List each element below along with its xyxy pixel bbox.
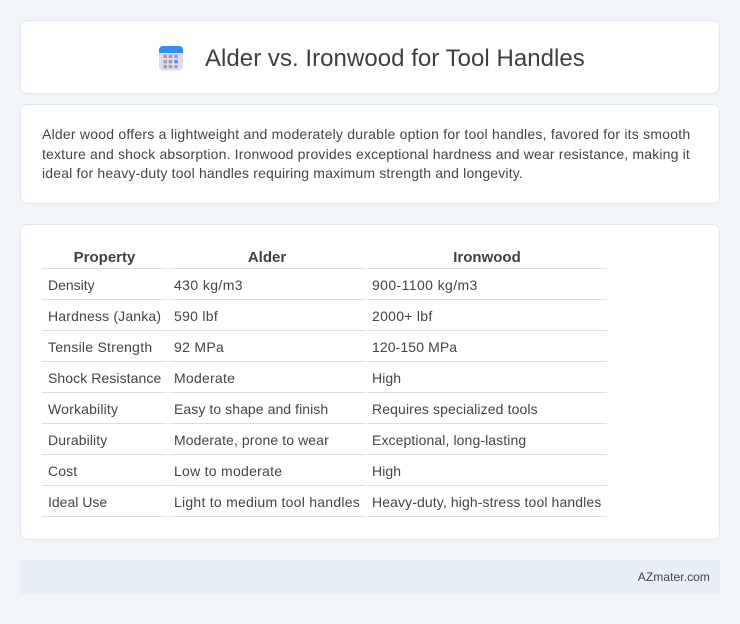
- row: shock resistance: Moderate: [174, 370, 235, 386]
- row: workability: [48, 401, 538, 417]
- row: hardness: 2000+ lbf: [372, 308, 433, 324]
- row: durability: Durability: [48, 432, 107, 448]
- header row: Property: [74, 249, 135, 266]
- row: tensile strength: [48, 339, 458, 355]
- row: durability: Moderate, prone to wear: [174, 432, 329, 448]
- row: tensile strength: 120-150 MPa: [372, 339, 457, 355]
- header row: [74, 249, 521, 266]
- row: shock resistance: [48, 370, 401, 386]
- row: shock resistance: High: [372, 370, 401, 386]
- row: hardness: [48, 308, 433, 324]
- row: hardness: Hardness (Janka): [48, 308, 161, 324]
- title card: [20, 20, 720, 94]
- row: cost: Low to moderate: [174, 463, 282, 479]
- row: cost: High: [372, 463, 401, 479]
- row: workability: Easy to shape and finish: [174, 401, 328, 417]
- row: workability: Workability: [48, 401, 118, 417]
- row: cost: Cost: [48, 463, 77, 479]
- icon: calendar: [159, 46, 183, 70]
- intro text: texture and shock absorption. Ironwood provides exceptional hardness and wear resistance, making it: [42, 146, 690, 162]
- row: workability: Requires specialized tools: [372, 401, 538, 417]
- footer source text: AZmater.com: [638, 570, 710, 584]
- row: hardness: 590 lbf: [174, 308, 218, 324]
- intro text: [42, 126, 690, 181]
- intro text panel: [20, 104, 720, 204]
- row: ideal use: [48, 494, 601, 510]
- header row: Ironwood: [453, 249, 521, 266]
- table panel: [20, 224, 720, 540]
- intro text: Alder wood offers a lightweight and moderately durable option for tool handles, favored for its smooth: [42, 126, 690, 142]
- title: Alder vs. Ironwood for Tool Handles: [205, 45, 585, 72]
- footer bar: [20, 560, 720, 594]
- row: durability: [48, 432, 526, 448]
- row: ideal use: Ideal Use: [48, 494, 107, 510]
- row: ideal use: Light to medium tool handles: [174, 494, 360, 510]
- row: tensile strength: Tensile Strength: [48, 339, 152, 355]
- intro text: ideal for heavy-duty tool handles requiring maximum strength and longevity.: [42, 165, 523, 181]
- row: shock resistance: Shock Resistance: [48, 370, 161, 386]
- row: tensile strength: 92 MPa: [174, 339, 224, 355]
- header row: Alder: [248, 249, 286, 266]
- row: ideal use: Heavy-duty, high-stress tool handles: [372, 494, 601, 510]
- row: cost: [48, 463, 401, 479]
- row: density: Density: [48, 277, 95, 293]
- row: density: 900-1100 kg/m3: [372, 277, 478, 293]
- row: density: 430 kg/m3: [174, 277, 243, 293]
- row: density: [48, 277, 478, 293]
- row: durability: Exceptional, long-lasting: [372, 432, 526, 448]
